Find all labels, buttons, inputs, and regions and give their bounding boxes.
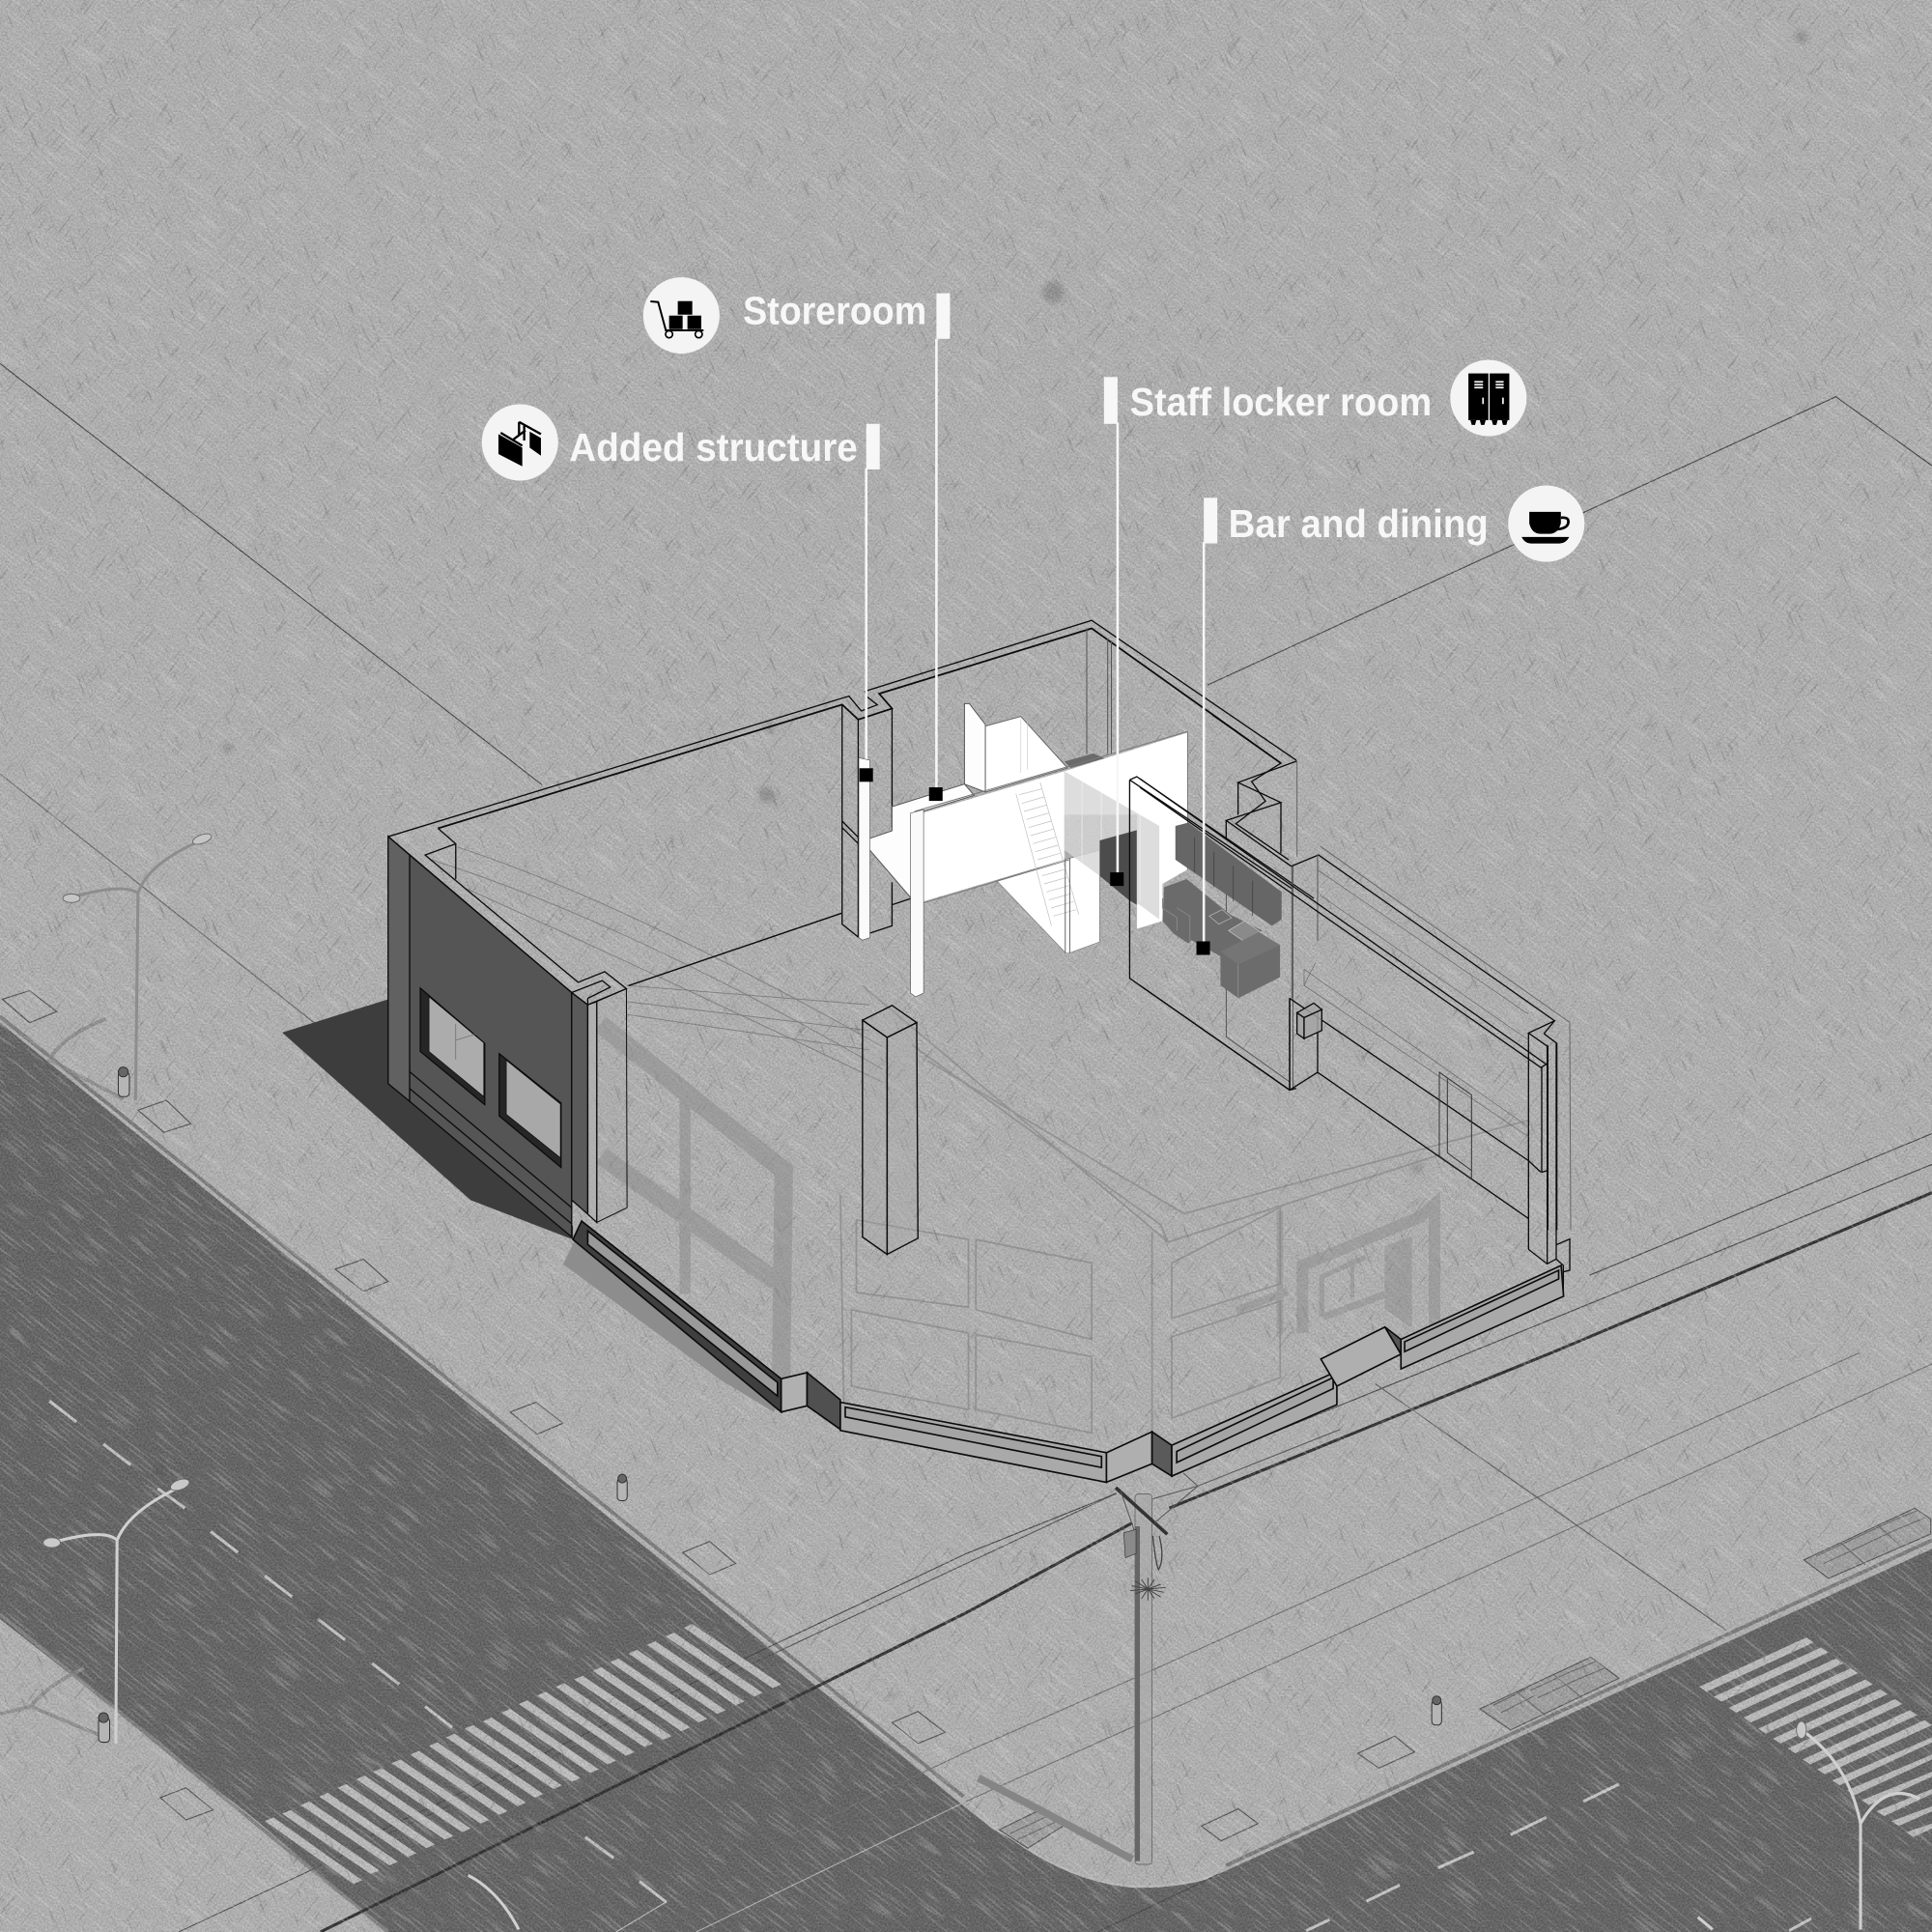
building shell: back wall <box>388 620 1296 985</box>
lane dashes <box>49 1401 1811 1931</box>
icon: cart with boxes <box>650 301 703 338</box>
wire bundle <box>1152 1536 1162 1570</box>
wall cap <box>388 828 626 1005</box>
lamp: lower left <box>43 1477 191 1744</box>
callout: storeroom <box>643 277 950 997</box>
wall segment: south-west <box>573 1221 781 1412</box>
white post <box>859 757 870 940</box>
pilaster glass <box>597 988 627 1222</box>
leader line <box>935 339 938 795</box>
storm drain gratings <box>999 1508 1931 1848</box>
road surface <box>0 1023 1932 1932</box>
wall segment: east <box>1401 1265 1564 1369</box>
lamp: upper left <box>63 832 213 1100</box>
building shell: south-east pier foot <box>1528 1043 1570 1294</box>
marker <box>929 787 943 801</box>
icon: coffee cup <box>1521 512 1569 544</box>
wall opening: south <box>845 1407 1101 1467</box>
label: Storeroom <box>743 288 926 332</box>
wall main face <box>410 855 572 1236</box>
marker <box>860 768 873 781</box>
lower stair wall <box>997 850 1099 953</box>
flag <box>867 424 880 469</box>
free-standing column <box>863 1006 918 1254</box>
translucent partition <box>1065 771 1159 920</box>
icon: lockers <box>1468 374 1509 425</box>
entrance step <box>1321 1327 1401 1386</box>
crosswalk: left street <box>265 1624 781 1884</box>
staircase <box>1016 782 1079 925</box>
hydrant <box>1432 1696 1441 1725</box>
label: Added structure <box>569 425 858 469</box>
hydrant <box>99 1713 110 1743</box>
low front wall segments <box>573 1221 1564 1482</box>
window right <box>499 1054 561 1167</box>
ghost windows on the ground <box>840 985 1529 1441</box>
interior: kitchen and mezzanine <box>862 703 1314 1090</box>
upper white panel <box>1065 732 1187 929</box>
icon circle <box>1450 359 1526 437</box>
utility pole <box>1116 1430 1340 1864</box>
cross arm <box>1116 1488 1167 1534</box>
wall segment: south <box>840 1403 1106 1482</box>
transformer box <box>1123 1529 1136 1558</box>
pole shaft <box>1135 1494 1152 1864</box>
corner dark face <box>1152 1432 1172 1476</box>
leader line <box>865 469 867 777</box>
pilaster side <box>572 992 587 1214</box>
label: Bar and dining <box>1229 501 1489 546</box>
mezzanine floor <box>862 784 974 898</box>
ghost shadow: corner entrance <box>1236 1205 1435 1333</box>
marker <box>1110 872 1123 886</box>
flag <box>1204 497 1217 543</box>
lamp shadows <box>0 1019 124 1735</box>
side door <box>1439 1072 1471 1179</box>
leader line <box>1203 542 1205 949</box>
kitchen island <box>1220 932 1280 998</box>
back panel <box>964 703 985 792</box>
window left <box>420 988 485 1104</box>
pole shadow <box>979 1778 1132 1860</box>
building shell: left wall <box>388 828 627 1236</box>
sidewalk manholes <box>3 991 1414 1841</box>
glass wall outline <box>1129 777 1314 1090</box>
flag <box>936 294 950 339</box>
icon: frame <box>498 422 541 467</box>
leader line <box>1117 423 1119 878</box>
wall opening: east <box>1405 1270 1559 1351</box>
pole dark edge <box>1135 1526 1140 1861</box>
callout: bar and dining <box>1197 486 1584 955</box>
pilaster strip <box>587 1002 597 1222</box>
building shell: east wall <box>1140 715 1571 1230</box>
crosswalk: right street <box>1699 1637 1932 1837</box>
stools <box>1162 898 1190 944</box>
jog dark face <box>807 1373 840 1430</box>
hydrant <box>617 1474 627 1501</box>
icon circle <box>482 404 558 480</box>
jog light face <box>781 1373 807 1412</box>
building ground shadow <box>282 999 573 1239</box>
street lamps <box>43 832 1919 1929</box>
lamp: lower right <box>1797 1721 1919 1929</box>
stair room wall <box>985 717 1067 792</box>
dark roof block <box>1065 753 1104 768</box>
flag <box>1104 377 1118 424</box>
mezzanine top edge <box>911 731 1187 903</box>
step dark face <box>1385 1327 1401 1354</box>
meter box <box>1297 1003 1321 1038</box>
icon circle <box>643 277 720 354</box>
fire hydrants <box>99 1067 1441 1743</box>
marker <box>1197 941 1210 955</box>
wall segment: south-east <box>1172 1372 1337 1476</box>
wall opening: south-west <box>587 1231 778 1396</box>
plinth lines <box>410 1071 572 1224</box>
corner block <box>1106 1432 1152 1482</box>
callout: added structure <box>482 404 880 940</box>
front soft shadow <box>563 1233 783 1412</box>
mezzanine front panel <box>911 771 1065 901</box>
brace wires <box>1121 1430 1340 1533</box>
sink <box>1209 910 1232 924</box>
paper stains <box>154 31 1807 1620</box>
wire burst <box>1130 1577 1166 1601</box>
callout: staff locker room <box>1104 359 1526 886</box>
door jamb <box>1065 858 1069 953</box>
upper kitchen cabinets <box>1176 823 1282 925</box>
cooktop <box>1229 921 1261 942</box>
hydrant <box>118 1067 129 1096</box>
icon circle <box>1508 486 1584 562</box>
dark doorway <box>1099 830 1137 905</box>
building shell: central pier <box>842 704 911 937</box>
faint view lines <box>432 847 882 1082</box>
counter <box>1162 879 1263 956</box>
label: Staff locker room <box>1130 380 1432 424</box>
ghost shadow of the window frame <box>600 1024 783 1378</box>
lamp: bottom partial <box>469 1875 1713 1929</box>
white post <box>911 810 923 997</box>
wall end face <box>388 837 410 1101</box>
wall opening: south-east <box>1177 1378 1333 1463</box>
curb lines <box>0 1016 1932 1932</box>
